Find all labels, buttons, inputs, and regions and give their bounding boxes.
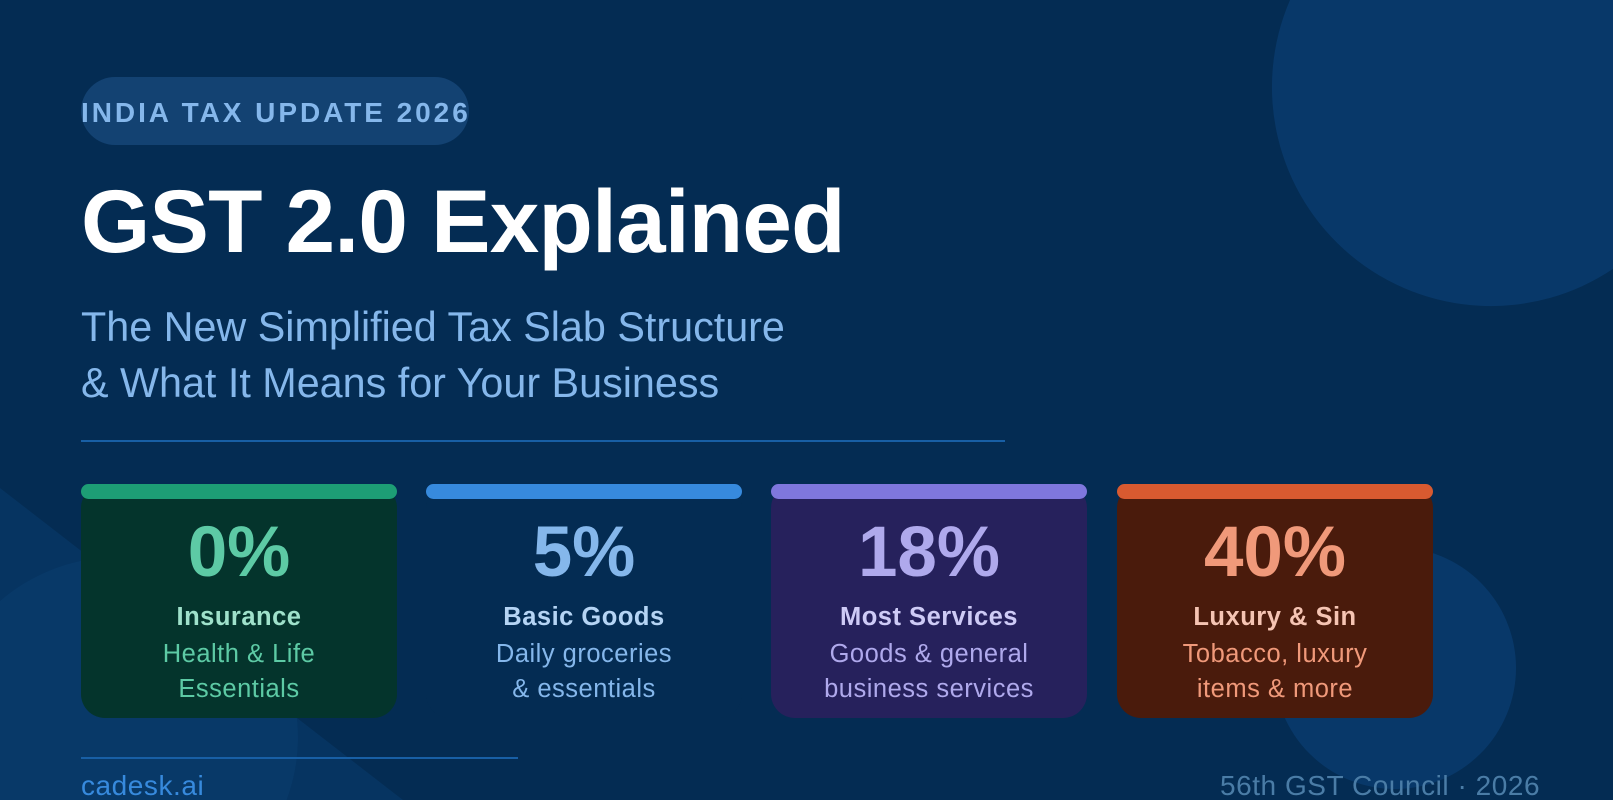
card: 5% basic goods (426, 484, 742, 718)
rate: 40% (1204, 513, 1346, 592)
description line 2: Essentials (178, 675, 300, 703)
description line 2: business services (824, 675, 1034, 703)
description: Tobacco, luxury (1183, 640, 1367, 668)
subtitle: & What It Means for Your Business (81, 360, 719, 406)
card accent bar (81, 484, 397, 499)
subtitle: The New Simplified Tax Slab Structure (81, 304, 785, 350)
rate: 18% (858, 513, 1000, 592)
footer line (81, 757, 518, 759)
category: Luxury & Sin (1193, 603, 1357, 631)
category: Basic Goods (503, 603, 665, 631)
category: Insurance (177, 603, 301, 631)
badge pill (81, 77, 469, 145)
subtitle (81, 304, 785, 406)
card accent bar (1117, 484, 1433, 499)
description: Health & Life (163, 640, 315, 668)
card: 18% most services (771, 484, 1087, 718)
badge text: INDIA TAX UPDATE 2026 (81, 97, 471, 128)
description: Goods & general (830, 640, 1028, 668)
rate: 5% (533, 513, 635, 592)
divider (81, 440, 1005, 442)
category: Most Services (840, 603, 1018, 631)
title: GST 2.0 Explained (81, 171, 845, 271)
card accent bar (771, 484, 1087, 499)
card: 0% insurance (81, 484, 397, 718)
card accent bar (426, 484, 742, 499)
description: Daily groceries (496, 640, 672, 668)
card: 40% luxury and sin (1117, 484, 1433, 718)
description line 2: items & more (1197, 675, 1353, 703)
rate: 0% (188, 513, 290, 592)
description line 2: & essentials (512, 675, 656, 703)
